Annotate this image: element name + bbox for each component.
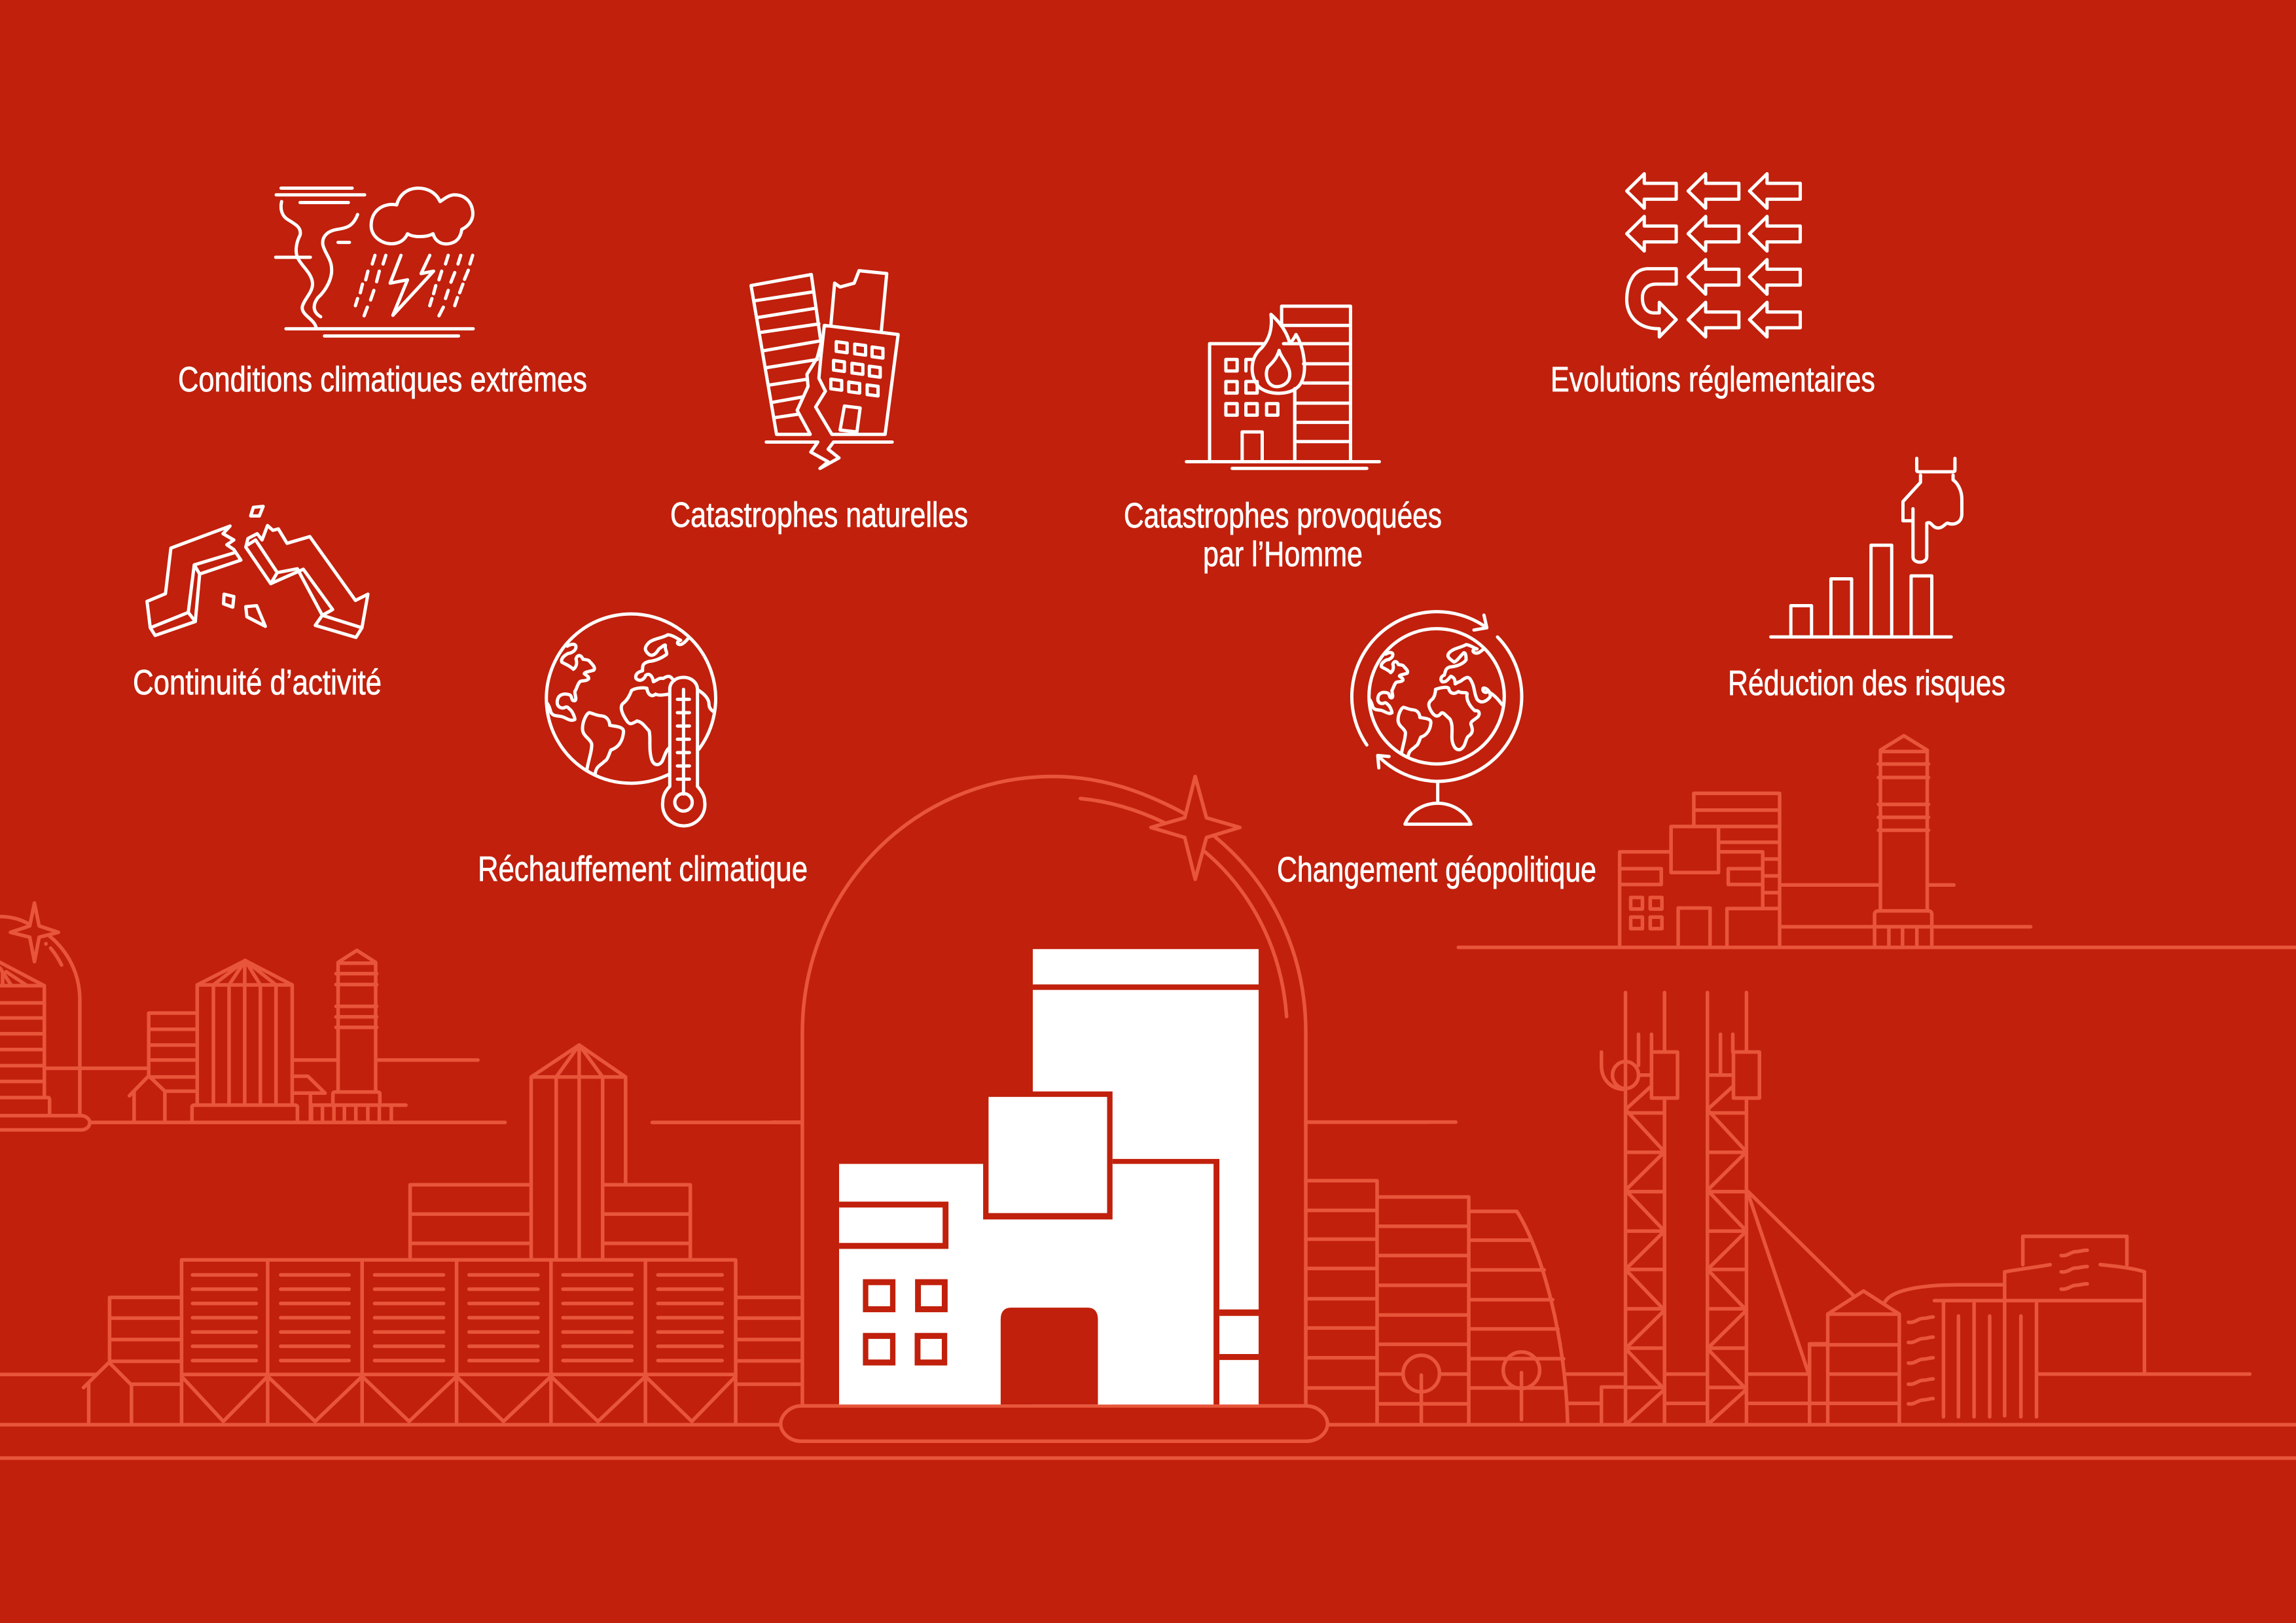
americas	[1369, 652, 1431, 757]
slats	[192, 1275, 722, 1361]
tank	[1884, 1236, 2250, 1417]
tall building	[1282, 306, 1350, 461]
lines meeting the dome	[772, 1120, 1427, 1124]
right stack	[736, 1298, 801, 1384]
tilted windows	[831, 342, 883, 396]
band	[839, 1202, 948, 1249]
icon: natural disaster	[751, 271, 898, 469]
upper ground	[1458, 946, 2296, 949]
stacked block 2	[1377, 1197, 1469, 1423]
icon: regulatory arrows	[1626, 173, 1801, 337]
icon: extreme weather	[276, 188, 473, 336]
label: geopolitical change: Changement géopolitique	[1277, 850, 1596, 889]
left tower	[751, 274, 821, 435]
silo	[192, 961, 297, 1122]
left fragment	[147, 526, 241, 635]
mini building	[1620, 793, 1780, 946]
label: risk reduction: Réduction des risques	[1728, 664, 2005, 703]
tower left	[1626, 993, 1664, 1423]
icon: global warming	[547, 614, 715, 826]
thermometer	[662, 677, 705, 826]
icon: business continuity broken arrow	[147, 507, 368, 637]
rain	[355, 255, 473, 316]
label: man-made disaster: Catastrophes provoquées	[1124, 496, 1442, 535]
tower stripes	[1033, 984, 1259, 1360]
connecting lines	[1781, 885, 2031, 927]
tower	[1033, 949, 1259, 1404]
fence	[312, 1105, 406, 1121]
chimney	[333, 950, 478, 1103]
tower base links	[1567, 1191, 1854, 1423]
mini windows	[1631, 897, 1662, 929]
windows	[863, 1279, 948, 1366]
squiggles	[1909, 1317, 1933, 1404]
upper ground	[90, 1120, 801, 1124]
cityscape: ground lines	[0, 1425, 2296, 1458]
label: business continuity: Continuité d’activité	[133, 663, 382, 702]
lower block outline	[1113, 1159, 1219, 1404]
globe	[547, 614, 715, 783]
dome base	[781, 1406, 1327, 1441]
tall silo	[531, 1045, 626, 1259]
annex	[292, 1060, 338, 1121]
curved building	[1469, 1211, 1568, 1423]
left building	[1210, 344, 1295, 461]
star	[1151, 776, 1240, 880]
label: extreme weather: Conditions climatiques extrêmes	[178, 360, 587, 399]
shards	[224, 507, 265, 626]
line to dome	[1306, 1120, 1456, 1124]
cityscape: right of dome	[1306, 993, 2250, 1423]
wind	[276, 188, 365, 257]
white protected building	[839, 949, 1259, 1404]
flame	[1252, 314, 1304, 393]
hopper row	[181, 1260, 736, 1425]
tower right	[1708, 993, 1746, 1423]
broken tower back	[831, 271, 887, 331]
chimney	[1874, 736, 1932, 946]
continents	[547, 635, 713, 774]
cracked ground	[766, 442, 892, 469]
label: natural disaster: Catastrophes naturelles	[670, 495, 968, 535]
door	[1001, 1308, 1098, 1404]
dome outline	[802, 776, 1306, 1404]
side blocks	[410, 1185, 691, 1259]
icon: geopolitical change globe	[1352, 612, 1522, 824]
trees	[1422, 1372, 1522, 1423]
label: man-made disaster: par l’Homme	[1203, 535, 1363, 574]
label: global warming: Réchauffement climatique	[478, 849, 808, 889]
left arrows	[1626, 173, 1801, 337]
ground	[1187, 462, 1379, 469]
africa and eurasia	[1429, 645, 1502, 750]
label: man-made disaster	[1124, 496, 1442, 574]
bars	[1771, 545, 1951, 637]
cityscape: far left plant with small dome	[0, 903, 801, 1130]
lower block	[839, 1164, 1213, 1404]
cityscape: upper right plant	[1458, 736, 2296, 948]
left stack and house	[0, 1298, 181, 1425]
protective dome with star	[772, 776, 1427, 1441]
lightning	[390, 255, 433, 315]
icon: risk reduction	[1771, 458, 1962, 637]
stand	[1405, 781, 1471, 824]
label: regulatory changes: Evolutions réglementaires	[1551, 360, 1875, 399]
u-turn arrow	[1626, 269, 1676, 337]
front building	[816, 325, 898, 435]
central block	[983, 1092, 1113, 1219]
tornado	[281, 202, 357, 329]
globe	[1369, 629, 1504, 764]
stacked block 1	[1306, 1181, 1377, 1423]
stack and small house	[130, 1013, 197, 1122]
right fragment	[246, 526, 368, 637]
small silo	[1810, 1291, 1899, 1423]
cloud	[371, 188, 473, 244]
icon: man-made disaster	[1187, 306, 1379, 469]
building under small dome	[0, 963, 149, 1115]
antennas	[1602, 1034, 1759, 1098]
cityscape: silo complex left of dome	[0, 1045, 801, 1425]
small star	[10, 903, 58, 961]
rotation arrows	[1352, 612, 1522, 781]
pointing hand	[1903, 458, 1962, 562]
dome highlight	[1081, 798, 1287, 1016]
small dome	[0, 917, 90, 1130]
ground	[286, 329, 473, 336]
